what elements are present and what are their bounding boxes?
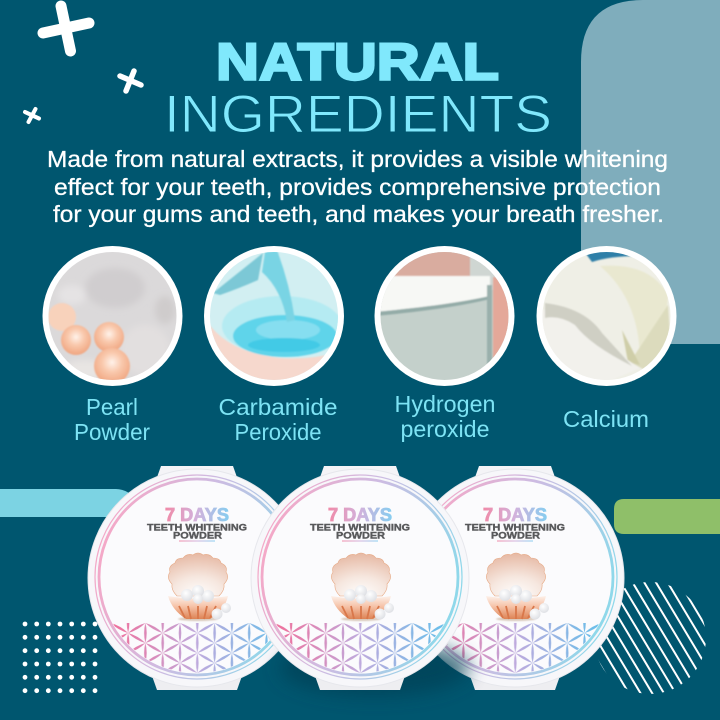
- icon: small plus: [25, 109, 39, 122]
- decorative striped circle: [598, 582, 706, 694]
- ingredient: hydrogen peroxide photo: [374, 246, 520, 386]
- icon: large plus: [43, 6, 89, 51]
- product: right powder case: [438, 466, 624, 690]
- label: hydrogen peroxide: Hydrogen: [394, 391, 496, 417]
- product: left powder case: 7 DAYS: [165, 505, 229, 525]
- panel: top right pale block: [581, 0, 720, 344]
- text block: description: effect for your teeth, provides comprehensive protection: [54, 174, 661, 200]
- label: pearl powder: [74, 394, 150, 445]
- text block: description: for your gums and teeth, and makes your breath fresher.: [53, 201, 664, 227]
- icon: medium plus: [120, 71, 141, 91]
- product: centre powder case: 7 DAYS: [328, 505, 392, 525]
- product: right powder case: 7 DAYS: [483, 505, 547, 525]
- product: centre powder case: TEETH WHITENING: [310, 522, 410, 534]
- product: left powder case: [88, 466, 278, 690]
- product: right powder case: TEETH WHITENING: [465, 522, 565, 534]
- ingredient: calcium photo: [536, 246, 677, 386]
- text block: description: Made from natural extracts, it provides a visible whitening: [47, 146, 668, 172]
- decorative dot grid: [23, 622, 97, 693]
- title: [164, 34, 552, 144]
- heading: ingredients: INGREDIENTS: [164, 85, 552, 144]
- label: calcium: Calcium: [563, 406, 649, 432]
- label: hydrogen peroxide: [394, 391, 496, 442]
- product shadow under centre case: [280, 640, 470, 696]
- text block: description: [47, 146, 668, 227]
- label: hydrogen peroxide: peroxide: [400, 416, 490, 442]
- ingredient: pearl powder photo: [42, 246, 182, 386]
- label: carbamide peroxide: Carbamide: [218, 394, 338, 420]
- product: right powder case: POWDER: [491, 530, 540, 542]
- product: centre powder case: POWDER: [336, 530, 385, 542]
- product: centre powder case: [251, 466, 469, 690]
- decorative bar: cyan: [0, 489, 132, 517]
- label: pearl powder: Pearl: [86, 394, 138, 420]
- product: left powder case: TEETH WHITENING: [147, 522, 247, 534]
- label: carbamide peroxide: [218, 394, 338, 445]
- decorative bar: green: [614, 499, 720, 534]
- label: pearl powder: Powder: [74, 419, 150, 445]
- heading: natural: NATURAL: [216, 34, 499, 92]
- product: left powder case: POWDER: [173, 530, 222, 542]
- ingredient: carbamide peroxide photo: [204, 246, 345, 386]
- label: carbamide peroxide: Peroxide: [234, 419, 322, 445]
